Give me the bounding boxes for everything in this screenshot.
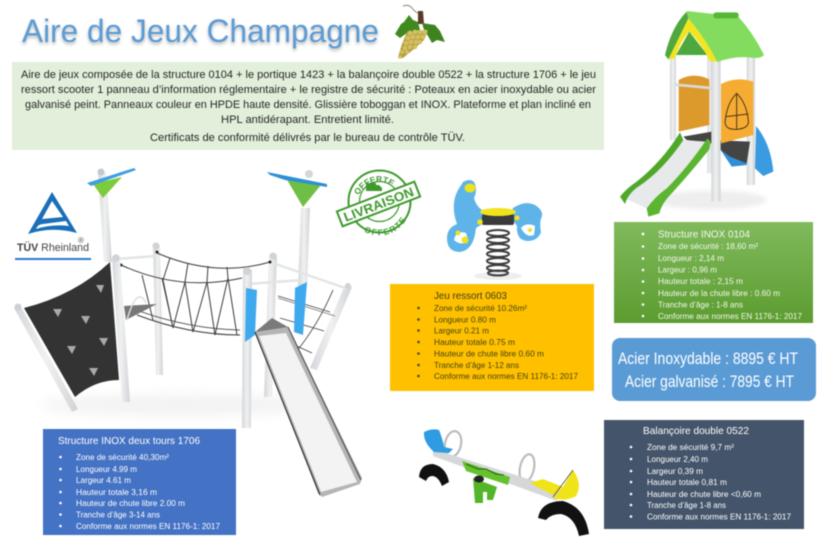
right roof panel — [305, 170, 313, 178]
panel: jeu ressort 0603: Conforme aux normes EN 1176-1: 2017 — [434, 371, 578, 381]
slide — [255, 318, 292, 346]
front right tyre — [538, 501, 589, 536]
left roof panel — [98, 168, 104, 176]
panel: jeu ressort 0603 — [390, 284, 594, 391]
panel: balançoire double 0522: Hauteur de chute libre <0,60 m — [647, 489, 761, 499]
illustration: seesaw 0522 — [419, 429, 589, 536]
yellow eave — [668, 18, 717, 62]
back posts — [670, 57, 676, 140]
icon: TÜV Rheinland logo: TÜV Rheinland — [17, 241, 89, 254]
yellow seat — [530, 479, 563, 495]
panel: structure INOX 0104: Tranche d’âge : 1-8 ans — [658, 300, 743, 310]
orange back panel — [679, 76, 709, 132]
panel: description: Certificats de conformité délivrés par le bureau de contrôle TÜV. — [150, 132, 465, 144]
roof underside — [676, 32, 707, 55]
panel: structure INOX 0104: Zone de sécurité : 18,60 m² — [658, 241, 758, 251]
climbing wall rail — [14, 305, 78, 412]
stamp: livraison offerte: OFFERTE — [364, 216, 406, 236]
panel: structure INOX 0104: Hauteur totale : 2,15 m — [658, 276, 743, 286]
yellow details — [456, 184, 532, 244]
illustration: spring rider scooter — [447, 180, 542, 280]
panel: description: Aire de jeux composée de la structure 0104 + le portique 1423 + la balançoire double 0522 + la structure 1706 + le jeu — [21, 69, 596, 81]
panel: structure INOX 0104 — [614, 222, 813, 323]
panel: structure INOX deux tours 1706: Hauteur totale 3,16 m — [76, 487, 157, 497]
panel: jeu ressort 0603: Zone de sécurité 10.26m² — [434, 303, 527, 313]
panel: prices — [612, 338, 816, 401]
beam — [433, 449, 560, 501]
panel: structure INOX 0104: Structure INOX 0104 — [658, 228, 750, 240]
icon: TÜV Rheinland logo: ® — [78, 236, 84, 245]
panel: balançoire double 0522: Tranche d’âge 1-8 ans — [647, 500, 726, 510]
panel: structure INOX deux tours 1706: Tranche d’âge 3-14 ans — [76, 510, 160, 520]
panel: structure INOX deux tours 1706: Zone de sécurité 40,30m² — [76, 452, 169, 462]
seat — [480, 208, 516, 216]
right side net — [277, 290, 335, 353]
panel: jeu ressort 0603: Jeu ressort 0603 — [434, 290, 507, 302]
panel: jeu ressort 0603: Hauteur de chute libre 0.60 m — [434, 348, 544, 358]
illustration: structure 1706 with two towers — [14, 168, 362, 497]
stamp: livraison offerte — [335, 168, 422, 236]
panel: structure INOX 0104: Hauteur de la chute libre : 0.60 m — [658, 288, 780, 298]
panel: structure INOX deux tours 1706: Conforme aux normes EN 1176-1: 2017 — [76, 521, 220, 531]
body — [447, 180, 486, 252]
spring — [487, 230, 509, 276]
panel: description — [12, 62, 604, 150]
orange front panel — [721, 79, 753, 143]
panel: jeu ressort 0603: Largeur 0.21 m — [434, 326, 489, 336]
green pivot — [473, 478, 497, 503]
right back post — [264, 255, 277, 397]
step platform — [124, 304, 157, 320]
rear left tyre — [419, 464, 449, 486]
panel: description: galvanisé peint. Panneaux couleur en HPDE haute densité. Glissière toboggan et INOX. Plateforme et plan incliné en — [25, 99, 591, 111]
panel: balançoire double 0522: Longueur 2,40 m — [647, 454, 708, 464]
panel: description: ressort scooter 1 panneau d’information réglementaire + le registre de sécurité : Poteaux en acier inoxydable ou acier — [21, 84, 596, 96]
panel: jeu ressort 0603: Hauteur totale 0.75 m — [434, 337, 515, 347]
panel: structure INOX deux tours 1706 — [43, 429, 236, 535]
front right post — [242, 270, 252, 428]
panel: structure INOX deux tours 1706: Structure INOX deux tours 1706 — [58, 435, 200, 447]
left tall post — [98, 172, 112, 262]
blue climber — [755, 126, 773, 176]
rope bridge — [121, 253, 270, 335]
panel: description: HPL antidérapant. Entretient limité. — [221, 114, 394, 126]
panel: balançoire double 0522: Conforme aux normes EN 1176-1: 2017 — [647, 512, 791, 522]
panel: structure INOX 0104: Conforme aux normes EN 1176-1: 2017 — [658, 311, 802, 321]
right tall post — [298, 208, 310, 286]
panel: structure INOX deux tours 1706: Longueur 4.99 m — [76, 464, 137, 474]
panel: structure INOX deux tours 1706: Largeur 4.61 m — [76, 475, 131, 485]
icon: grape bunch — [395, 5, 445, 59]
handles — [442, 430, 537, 483]
panel: jeu ressort 0603: Tranche d’âge 1-12 ans — [434, 360, 519, 370]
right slanted post — [310, 285, 352, 370]
panel: balançoire double 0522: Largeur 0,39 m — [647, 466, 703, 476]
panel: balançoire double 0522: Hauteur totale 0,81 m — [647, 477, 727, 487]
panel: balançoire double 0522: Zone de sécurité 9,7 m² — [647, 442, 734, 452]
roof — [687, 11, 764, 62]
slide — [625, 140, 706, 208]
title: Aire de Jeux Champagne — [22, 13, 379, 49]
front left post — [112, 258, 130, 402]
panel: structure INOX deux tours 1706: Hauteur de chute libre 2.00 m — [76, 498, 185, 508]
illustration: structure 0104 play house — [620, 11, 773, 217]
panel: structure INOX 0104: Longueur : 2,14 m — [658, 253, 724, 263]
climbing holds — [53, 285, 108, 376]
stamp: livraison offerte: OFFERTE — [354, 175, 396, 195]
panel: balançoire double 0522 — [604, 420, 804, 529]
rails — [116, 256, 348, 289]
blue seat — [424, 429, 453, 453]
back post of bridge — [153, 246, 163, 375]
panel: jeu ressort 0603: Longueur 0.80 m — [434, 314, 496, 324]
blue side panels — [245, 288, 257, 342]
panel: balançoire double 0522: Balançoire double 0522 — [643, 425, 749, 437]
front post — [711, 60, 721, 201]
stamp: livraison offerte: LIVRAISON — [341, 184, 416, 225]
climbing wall — [24, 262, 119, 397]
panel: structure INOX 0104: Largeur : 0,96 m — [658, 264, 717, 274]
icon: TÜV Rheinland logo — [15, 192, 91, 260]
